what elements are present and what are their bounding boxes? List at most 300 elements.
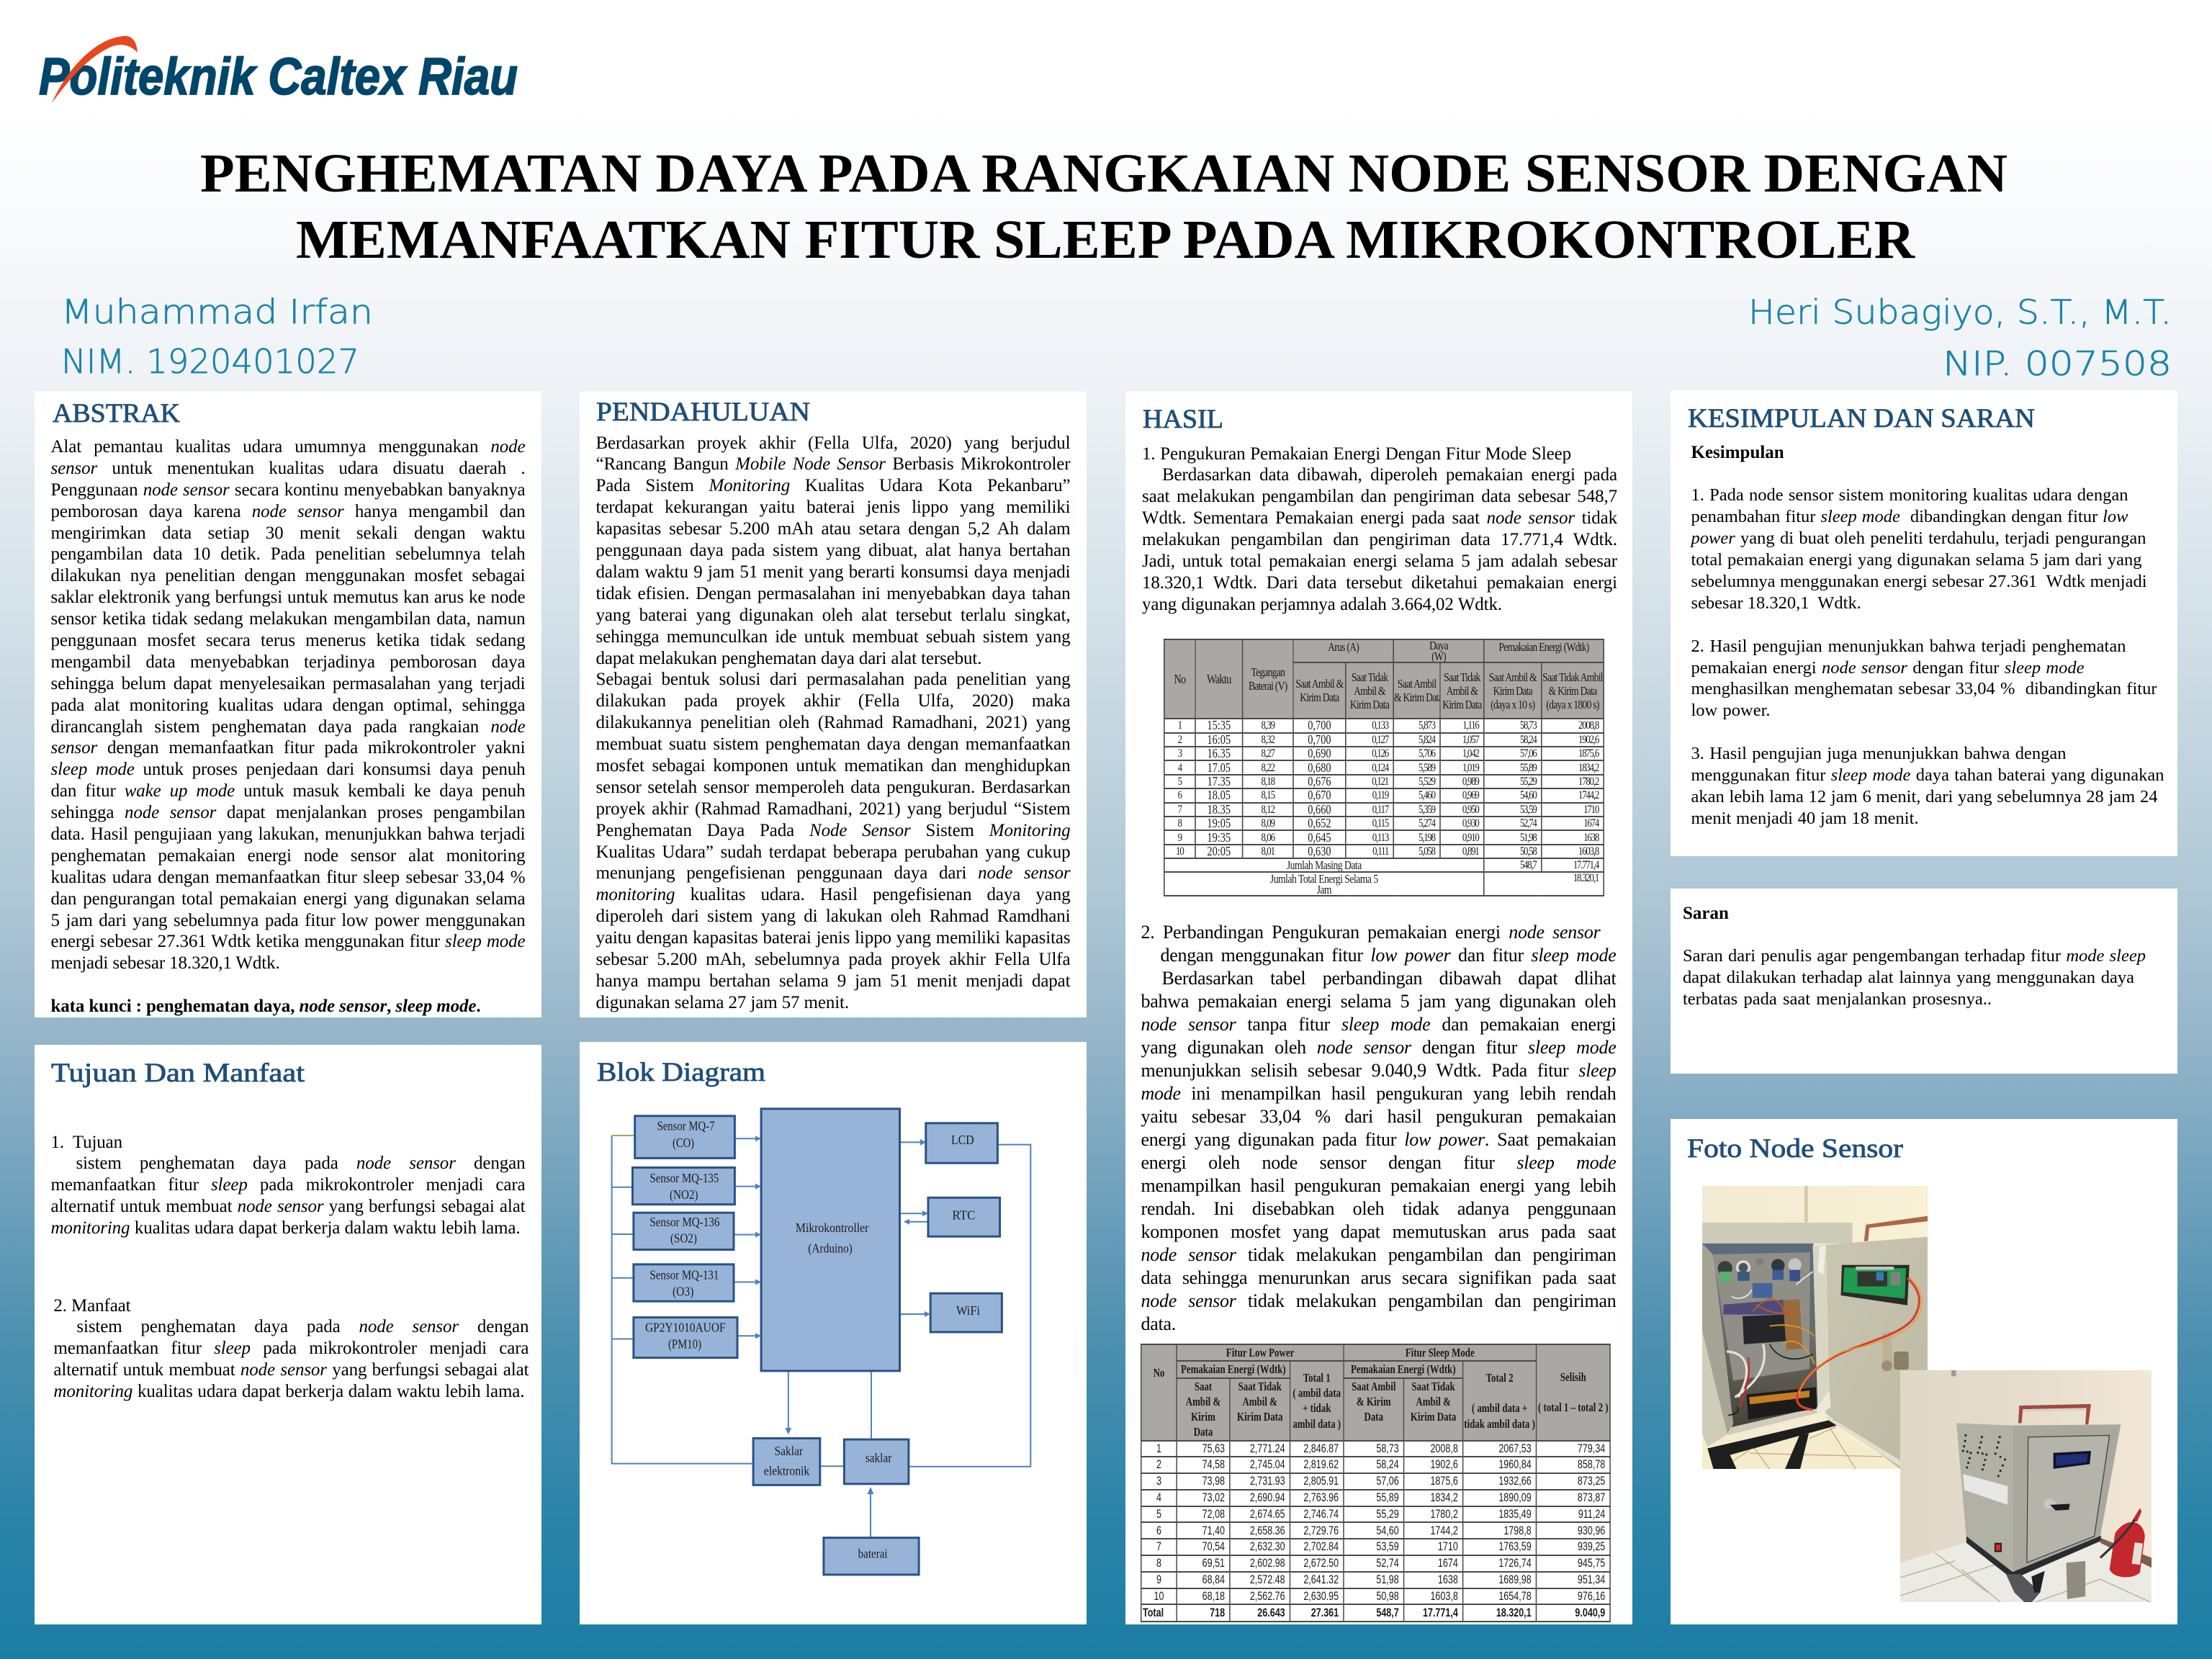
text: pendahuluan body: menunjang pengefisienan penggunaan daya dari node sensor — [596, 863, 1070, 883]
table: pengukuran energi fitur sleep mode: 8,18 — [1261, 775, 1274, 788]
table: perbandingan fitur low power dan sleep mode: ( total 1 – total 2 ) — [1538, 1401, 1609, 1414]
table: pengukuran energi fitur sleep mode: (daya x 1800 s) — [1546, 698, 1599, 711]
table: pengukuran energi fitur sleep mode: 1710 — [1583, 804, 1599, 816]
text: manfaat: memanfaatkan fitur sleep pada mikrokontroler menjadi cara — [53, 1339, 529, 1358]
text: hasil part 1: Wdtk. Sementara Pemakaian energi pada saat node sensor tidak — [1142, 508, 1617, 528]
table: perbandingan fitur low power dan sleep mode: Saat — [1195, 1380, 1212, 1393]
table: perbandingan fitur low power dan sleep mode: 73,98 — [1202, 1475, 1225, 1488]
sensor boxes: (SO2) — [670, 1231, 697, 1246]
table: perbandingan fitur low power dan sleep mode: 2,690.94 — [1250, 1491, 1285, 1504]
text: manfaat — [53, 1296, 529, 1401]
table: pengukuran energi fitur sleep mode: 8,32 — [1261, 734, 1274, 746]
text: kesimpulan: menit menjadi 40 jam 18 menit. — [1691, 809, 1918, 828]
text: hasil part 2: node sensor tidak melakukan pengambilan dan pengiriman — [1141, 1244, 1617, 1265]
text: tujuan: alternatif untuk membuat node sensor yang berfungsi sebagai alat — [50, 1197, 526, 1216]
table: pengukuran energi fitur sleep mode: 2 — [1177, 734, 1182, 746]
text: abstrak body: penggunaan mosfet secara terus menerus ketika tidak sedang — [50, 631, 526, 650]
table: pengukuran energi fitur sleep mode: 6 — [1177, 789, 1182, 801]
sensor boxes — [632, 1116, 737, 1358]
table: pengukuran energi fitur sleep mode: Tegangan — [1251, 665, 1285, 679]
advisor name and NIP: Heri Subagiyo, S.T., M.T. — [1748, 292, 2172, 331]
table: pengukuran energi fitur sleep mode: 5,824 — [1419, 734, 1434, 746]
table: pengukuran energi fitur sleep mode: 8,06 — [1261, 832, 1274, 844]
table: pengukuran energi fitur sleep mode: 5 — [1177, 775, 1182, 788]
table: perbandingan fitur low power dan sleep mode: 1932,66 — [1499, 1475, 1532, 1488]
heading: pendahuluan: PENDAHULUAN — [596, 397, 810, 427]
table: pengukuran energi fitur sleep mode: 5,706 — [1419, 747, 1434, 760]
table: perbandingan fitur low power dan sleep mode: 3 — [1156, 1475, 1161, 1488]
text: kesimpulan: menggunakan fitur sleep mode daya tahan baterai yang digunakan — [1691, 765, 2164, 785]
text: pendahuluan body: digunakan selama 27 jam 57 menit. — [596, 993, 849, 1012]
table: pengukuran energi fitur sleep mode: 8,12 — [1261, 804, 1274, 816]
text: hasil part 1: 1. Pengukuran Pemakaian Energi Dengan Fitur Mode Sleep — [1142, 444, 1571, 464]
text: abstrak body: dilakukan nya penelitian dengan menggunakan mosfet sebagai — [50, 566, 526, 585]
table: pengukuran energi fitur sleep mode: 17.771,4 — [1573, 859, 1599, 871]
text: hasil part 2: Berdasarkan tabel perbandingan dibawah dapat dlihat — [1162, 968, 1616, 989]
text: abstrak body: pengambilan data 10 detik. Pada penelitian sebelumnya telah — [50, 544, 526, 564]
text: hasil part 2: node sensor tidak melakukan pengambilan dan pengiriman — [1141, 1290, 1617, 1311]
table: perbandingan fitur low power dan sleep mode: 1763,59 — [1499, 1540, 1532, 1553]
table: perbandingan fitur low power dan sleep mode: 68,18 — [1202, 1590, 1225, 1603]
table: perbandingan fitur low power dan sleep mode: 53,59 — [1377, 1540, 1399, 1553]
text: saran — [1683, 904, 2146, 1009]
text: pendahuluan body: membuat suatu sistem penghematan daya dengan memanfaatkan — [596, 734, 1070, 754]
table: perbandingan fitur low power dan sleep mode: 2067,53 — [1499, 1442, 1532, 1455]
text: hasil part 2: data. — [1141, 1313, 1176, 1334]
table: pengukuran energi fitur sleep mode: 1780,2 — [1578, 775, 1599, 788]
text: pendahuluan body: tidak efisien. Dengan permasalahan ini menyebabkan daya tahan — [596, 584, 1070, 603]
table: pengukuran energi fitur sleep mode: & Kirim Data — [1548, 684, 1596, 698]
table: perbandingan fitur low power dan sleep mode: Ambil & — [1416, 1395, 1451, 1408]
table: pengukuran energi fitur sleep mode: 0,115 — [1372, 817, 1388, 830]
table: pengukuran energi fitur sleep mode: 1744,2 — [1578, 789, 1599, 801]
text: abstrak body: Penggunaan node sensor secara kontinu menyebabkan banyaknya — [50, 480, 526, 500]
text: kesimpulan: Kesimpulan — [1691, 443, 1784, 462]
table: perbandingan fitur low power dan sleep mode: 1638 — [1438, 1573, 1458, 1586]
text: kesimpulan — [1690, 443, 2164, 828]
table: pengukuran energi fitur sleep mode: Baterai (V) — [1248, 679, 1287, 693]
text: pendahuluan body: monitoring kualitas udara. Hasil pengefisienan daya yang — [596, 885, 1070, 904]
table: perbandingan fitur low power dan sleep mode: 1726,74 — [1499, 1557, 1532, 1570]
text: pendahuluan body — [596, 433, 1071, 1012]
table: perbandingan fitur low power dan sleep mode: 2,632.30 — [1250, 1540, 1285, 1553]
sensor boxes: (CO) — [673, 1136, 694, 1151]
table: perbandingan fitur low power dan sleep mode: 939,25 — [1578, 1540, 1605, 1553]
table: perbandingan fitur low power dan sleep mode: 779,34 — [1578, 1442, 1605, 1455]
table: perbandingan fitur low power dan sleep mode: Kirim Data — [1237, 1410, 1283, 1424]
table: pengukuran energi fitur sleep mode: (daya x 10 s) — [1491, 698, 1534, 711]
text: abstrak body: sleep mode untuk proses penjedaan dari konsumsi daya penuh — [50, 760, 526, 779]
table: perbandingan fitur low power dan sleep mode: 6 — [1156, 1524, 1161, 1537]
text: hasil part 2: rendah. Ini disebabkan oleh tidak adanya penggunaan — [1141, 1198, 1616, 1219]
text: abstrak body: dan fitur wake up mode untuk masuk kembali ke daya penuh — [50, 781, 526, 801]
sensor boxes: Sensor MQ-7 — [657, 1119, 714, 1133]
text: kesimpulan: pemakaian energi node sensor dengan fitur sleep mode — [1691, 658, 2084, 677]
text: manfaat: sistem penghematan daya pada node sensor dengan — [76, 1317, 529, 1336]
photo: node sensor closed box — [1900, 1370, 2152, 1602]
table: perbandingan fitur low power dan sleep mode: 58,24 — [1377, 1458, 1399, 1471]
text: hasil part 1 — [1142, 444, 1617, 614]
table: perbandingan fitur low power dan sleep mode: 718 — [1210, 1606, 1225, 1619]
table: perbandingan fitur low power dan sleep mode: 2,771.24 — [1250, 1442, 1285, 1455]
text: kesimpulan: low power. — [1691, 701, 1770, 720]
sensor boxes: GP2Y1010AUOF — [645, 1321, 726, 1335]
text: abstrak body: sensor untuk menentukan kualitas udara disuatu daerah . — [50, 459, 526, 478]
microcontroller box: (Arduino) — [808, 1241, 853, 1256]
table: pengukuran energi fitur sleep mode: 0,969 — [1462, 789, 1478, 801]
text: kesimpulan: 2. Hasil pengujian menunjukkan bahwa terjadi penghematan — [1691, 637, 2126, 656]
table: perbandingan fitur low power dan sleep mode: Kirim Data — [1411, 1410, 1457, 1424]
table: pengukuran energi fitur sleep mode: 1834,2 — [1578, 762, 1599, 774]
table: perbandingan fitur low power dan sleep mode: Total — [1143, 1606, 1164, 1619]
panel: saran — [1671, 889, 2177, 1074]
text: kesimpulan: sebelumnya menggunakan energi sebesar 27.361 Wdtk menjadi — [1691, 572, 2147, 591]
table: pengukuran energi fitur sleep mode: 8,39 — [1261, 719, 1274, 732]
table: pengukuran energi fitur sleep mode: 0,930 — [1462, 817, 1478, 830]
text: pendahuluan body: dapat melakukan penghematan daya dari alat tersebut. — [596, 648, 981, 668]
table: perbandingan fitur low power dan sleep mode: 2,572.48 — [1250, 1573, 1285, 1586]
microcontroller box — [761, 1109, 900, 1371]
table: pengukuran energi fitur sleep mode: 1674 — [1583, 817, 1599, 830]
table: pengukuran energi fitur sleep mode: 53,59 — [1519, 804, 1536, 816]
text: tujuan: 1. Tujuan — [50, 1133, 122, 1152]
text: pendahuluan body: Pada Sistem Monitoring Kualitas Udara Kota Pekanbaru” — [596, 476, 1070, 495]
table: perbandingan fitur low power dan sleep mode: 1834,2 — [1431, 1491, 1458, 1504]
table: pengukuran energi fitur sleep mode: 0,113 — [1372, 832, 1388, 844]
table: pengukuran energi fitur sleep mode: Saat Ambil & — [1295, 677, 1343, 691]
text: kesimpulan: sebesar 18.320,1 Wdtk. — [1691, 593, 1861, 613]
text: abstrak body: saklar elektronik yang berfungsi untuk memutus kan arus ke node — [50, 588, 526, 607]
text: pendahuluan body: dalam waktu 9 jam 51 menit yang berarti konsumsi daya menjadi — [596, 562, 1070, 582]
output boxes: LCD — [951, 1133, 974, 1147]
table: pengukuran energi fitur sleep mode: Saat Ambil — [1397, 677, 1436, 691]
table: pengukuran energi fitur sleep mode: 18.320,1 — [1573, 872, 1599, 884]
table: perbandingan fitur low power dan sleep mode: 9 — [1156, 1573, 1161, 1586]
text: tujuan: sistem penghematan daya pada node sensor dengan — [76, 1154, 526, 1173]
text: pendahuluan body: Penghematan Daya Pada Node Sensor Sistem Monitoring — [596, 821, 1070, 840]
text: hasil part 2: menampilkan hasil pengukuran pemakaian energi yang lebih — [1141, 1175, 1616, 1196]
power boxes: saklar — [866, 1450, 891, 1465]
text: kesimpulan: power yang di buat oleh peneliti terdahulu, terjadi pengurangan — [1691, 529, 2146, 548]
table: perbandingan fitur low power dan sleep mode: 68,84 — [1202, 1573, 1225, 1586]
table: pengukuran energi fitur sleep mode: Ambil & — [1446, 684, 1478, 698]
text: pendahuluan body: terdapat kekurangan yaitu baterai jenis lippo yang memiliki — [596, 498, 1070, 517]
table: perbandingan fitur low power dan sleep mode: 8 — [1156, 1557, 1161, 1570]
table: perbandingan fitur low power dan sleep mode: Total 1 — [1303, 1371, 1331, 1385]
table: perbandingan fitur low power dan sleep mode: 1960,84 — [1499, 1458, 1532, 1471]
table: pengukuran energi fitur sleep mode: 8,22 — [1261, 762, 1274, 774]
table: perbandingan fitur low power dan sleep mode: Total 2 — [1486, 1371, 1514, 1385]
microcontroller box: Mikrokontroller — [796, 1220, 868, 1235]
table: perbandingan fitur low power dan sleep mode: 2,562.76 — [1250, 1590, 1285, 1603]
table: perbandingan fitur low power dan sleep mode: 2,846.87 — [1304, 1442, 1339, 1455]
text: hasil part 2: data sehingga menurunkan arus secara signifikan pada saat — [1141, 1267, 1616, 1288]
title — [200, 143, 2008, 270]
sensor boxes: (NO2) — [670, 1187, 698, 1202]
table: perbandingan fitur low power dan sleep mode: ( ambil data — [1293, 1386, 1341, 1400]
table: perbandingan fitur low power dan sleep mode: 4 — [1156, 1491, 1161, 1504]
table: perbandingan fitur low power dan sleep mode: 51,98 — [1377, 1573, 1399, 1586]
author name and NIM: Muhammad Irfan — [61, 292, 373, 331]
table: pengukuran energi fitur sleep mode: Saat Tidak — [1351, 670, 1388, 684]
text: abstrak body: sensor dengan memanfaatkan fitur pada mikrokontroler yakni — [50, 738, 526, 757]
sensor boxes: (PM10) — [668, 1336, 701, 1352]
table: pengukuran energi fitur sleep mode: (W) — [1431, 649, 1445, 662]
text: pendahuluan body: yang baterai yang digunakan oleh alat tersebut terlalu singkat, — [596, 606, 1070, 625]
table: perbandingan fitur low power dan sleep mode: 52,74 — [1377, 1557, 1399, 1570]
text: kesimpulan: menghasilkan menghematan sebesar 33,04 % dibandingkan fitur — [1691, 679, 2157, 698]
author name and NIM: NIM. 1920401027 — [61, 342, 359, 381]
table: pengukuran energi fitur sleep mode: 1875,6 — [1578, 747, 1599, 760]
table: perbandingan fitur low power dan sleep mode: ambil data ) — [1293, 1417, 1341, 1431]
output boxes — [926, 1123, 1002, 1332]
table: pengukuran energi fitur sleep mode: 0,111 — [1372, 845, 1388, 858]
table: perbandingan fitur low power dan sleep mode: 873,87 — [1578, 1491, 1605, 1504]
table: pengukuran energi fitur sleep mode: 5,359 — [1419, 804, 1434, 816]
table: pengukuran energi fitur sleep mode: Kirim Data — [1493, 684, 1532, 698]
power boxes: baterai — [858, 1546, 888, 1560]
table: pengukuran energi fitur sleep mode: 0,950 — [1462, 804, 1478, 816]
table: perbandingan fitur low power dan sleep mode: 50,98 — [1377, 1590, 1399, 1603]
table: pengukuran energi fitur sleep mode: 8 — [1177, 817, 1182, 830]
author name and NIM — [61, 292, 373, 381]
panel: blok diagram — [580, 1042, 1087, 1624]
text: pendahuluan body: “Rancang Bangun Mobile Node Sensor Berbasis Mikrokontroler — [596, 454, 1070, 474]
text: hasil part 2: 2. Perbandingan Pengukuran pemakaian energi node sensor — [1141, 922, 1600, 943]
text: hasil part 2: yang digunakan oleh node sensor dengan fitur sleep mode — [1141, 1037, 1617, 1058]
table: pengukuran energi fitur sleep mode: 0,891 — [1462, 845, 1478, 858]
chart: block diagram — [611, 1107, 1031, 1575]
table: perbandingan fitur low power dan sleep mode: 2,672.50 — [1304, 1557, 1339, 1570]
table: pengukuran energi fitur sleep mode: 55,29 — [1519, 775, 1536, 788]
table: pengukuran energi fitur sleep mode: No — [1174, 672, 1185, 686]
table: perbandingan fitur low power dan sleep mode: 2,674.65 — [1250, 1508, 1285, 1521]
table: pengukuran energi fitur sleep mode: Kirim Data — [1300, 691, 1339, 704]
table: perbandingan fitur low power dan sleep mode: 945,75 — [1578, 1557, 1605, 1570]
table: pengukuran energi fitur sleep mode: Waktu — [1206, 672, 1231, 686]
table: perbandingan fitur low power dan sleep mode: Fitur Sleep Mode — [1406, 1346, 1475, 1359]
table: perbandingan fitur low power dan sleep mode: Saat Ambil — [1352, 1380, 1396, 1393]
table: pengukuran energi fitur sleep mode: 5,589 — [1419, 762, 1434, 774]
text: pendahuluan body: proyek akhir (Rahmad Ramadhani, 2021) yang berjudul “Sistem — [596, 799, 1070, 819]
table: perbandingan fitur low power dan sleep mode: 930,96 — [1578, 1524, 1605, 1537]
table: pengukuran energi fitur sleep mode: 1638 — [1583, 832, 1599, 844]
table: perbandingan fitur low power dan sleep mode: Pemakaian Energi (Wdtk) — [1181, 1362, 1286, 1376]
table: perbandingan fitur low power dan sleep mode: Saat Tidak — [1412, 1380, 1455, 1393]
text: abstrak body: sensor ketika tidak sedang melakukan mengambilan data, namun — [50, 609, 526, 629]
table: perbandingan fitur low power dan sleep mode: Pemakaian Energi (Wdtk) — [1351, 1362, 1456, 1376]
table: perbandingan fitur low power dan sleep mode: No — [1154, 1366, 1165, 1380]
table: pengukuran energi fitur sleep mode: Arus (A) — [1328, 640, 1359, 654]
table: pengukuran energi fitur sleep mode: 0,133 — [1372, 719, 1388, 732]
sensor boxes: Sensor MQ-135 — [649, 1171, 719, 1185]
text: hasil part 1: melakukan pengambilan dan pengiriman data 17.771,4 Wdtk. — [1142, 530, 1617, 549]
text: abstrak body: pada alat monitoring kualitas udara dengan optimal, sehingga — [50, 696, 526, 715]
text: manfaat: 2. Manfaat — [53, 1296, 130, 1316]
table: perbandingan fitur low power dan sleep mode: 1780,2 — [1431, 1508, 1458, 1521]
table: perbandingan fitur low power dan sleep mode: & Kirim — [1357, 1395, 1391, 1408]
table: perbandingan fitur low power dan sleep mode: + tidak — [1303, 1401, 1331, 1415]
table: pengukuran energi fitur sleep mode: Jumlah Masing Data — [1286, 858, 1361, 872]
table: perbandingan fitur low power dan sleep mode: 75,63 — [1202, 1442, 1225, 1455]
text: kesimpulan: 1. Pada node sensor sistem monitoring kualitas udara dengan — [1691, 485, 2128, 505]
table: pengukuran energi fitur sleep mode: 1 — [1177, 719, 1182, 732]
table: perbandingan fitur low power dan sleep mode: 2,658.36 — [1250, 1524, 1285, 1537]
table: pengukuran energi fitur sleep mode: 54,60 — [1519, 789, 1536, 801]
text: pendahuluan body: Berdasarkan proyek akhir (Fella Ulfa, 2020) yang berjudul — [596, 433, 1070, 453]
table: pengukuran energi fitur sleep mode: 1,057 — [1462, 734, 1478, 746]
text: tujuan — [50, 1133, 526, 1238]
table: perbandingan fitur low power dan sleep mode: Data — [1364, 1410, 1383, 1424]
text: pendahuluan body: dilakukannya penelitian oleh (Rahmad Ramadhani, 2021) yang — [596, 713, 1070, 732]
table: pengukuran energi fitur sleep mode: 55,89 — [1519, 762, 1536, 774]
table: perbandingan fitur low power dan sleep mode: 1603,8 — [1431, 1590, 1458, 1603]
text: pendahuluan body: yaitu dengan kapasitas baterai jenis lippo yang memiliki kapasitas — [596, 928, 1070, 948]
table: pengukuran energi fitur sleep mode: 2008,8 — [1578, 719, 1599, 732]
table: perbandingan fitur low power dan sleep mode: 55,89 — [1377, 1491, 1399, 1504]
heading: abstrak: ABSTRAK — [53, 399, 180, 428]
table: pengukuran energi fitur sleep mode: 8,15 — [1261, 789, 1274, 801]
text: pendahuluan body: hanya mampu bertahan selama 9 jam 51 menit menjadi dapat — [596, 971, 1070, 991]
table: perbandingan fitur low power dan sleep mode: 2,729.76 — [1304, 1524, 1339, 1537]
text: hasil part 1: Berdasarkan data dibawah, diperoleh pemakaian energi pada — [1162, 465, 1617, 485]
text: kesimpulan: 3. Hasil pengujian juga menunjukkan bahwa dengan — [1691, 744, 2067, 763]
table: perbandingan fitur low power dan sleep mode: 2,745.04 — [1250, 1458, 1285, 1471]
table: pengukuran energi fitur sleep mode: Saat Tidak — [1444, 670, 1480, 684]
table: pengukuran energi fitur sleep mode: 0,127 — [1372, 734, 1388, 746]
table: perbandingan fitur low power dan sleep mode: 72,08 — [1202, 1508, 1225, 1521]
table: perbandingan fitur low power dan sleep mode: Ambil & — [1243, 1395, 1277, 1408]
table: perbandingan fitur low power dan sleep mode: 10 — [1154, 1590, 1164, 1603]
table: perbandingan fitur low power dan sleep mode: 548,7 — [1377, 1606, 1399, 1619]
text: abstrak body: penghematan pemakaian energi node sensor alat monitoring — [50, 846, 526, 866]
text: abstrak body: dan pengurangan total pemakaian energi yang digunakan selama — [50, 889, 526, 909]
table: perbandingan fitur low power dan sleep mode — [1141, 1344, 1611, 1622]
table: pengukuran energi fitur sleep mode: 0,121 — [1372, 775, 1388, 788]
table: pengukuran energi fitur sleep mode: 5,058 — [1419, 845, 1434, 858]
table: perbandingan fitur low power dan sleep mode: 1 — [1156, 1442, 1161, 1455]
panel: hasil — [1125, 391, 1632, 1624]
table: pengukuran energi fitur sleep mode: Kirim Data — [1442, 698, 1481, 711]
table: pengukuran energi fitur sleep mode: 3 — [1177, 747, 1182, 760]
advisor name and NIP: NIP. 007508 — [1943, 344, 2172, 383]
table: perbandingan fitur low power dan sleep mode: Fitur Low Power — [1226, 1346, 1294, 1359]
table: pengukuran energi fitur sleep mode: 0,910 — [1462, 832, 1478, 844]
text: tujuan: monitoring kualitas udara dapat berkerja dalam waktu lebih lama. — [50, 1218, 520, 1238]
table: pengukuran energi fitur sleep mode: Ambil & — [1354, 684, 1385, 698]
text: kesimpulan: penambahan fitur sleep mode dibandingkan dengan fitur low — [1691, 507, 2128, 526]
table: pengukuran energi fitur sleep mode: 5,274 — [1419, 817, 1434, 830]
table: pengukuran energi fitur sleep mode: Kirim Data — [1349, 698, 1389, 711]
title: PENGHEMATAN DAYA PADA RANGKAIAN NODE SENSOR DENGAN — [200, 143, 2008, 204]
text: abstrak body: data. Hasil pengujiaan yang lakukan, menunjukkan bahwa terjadi — [50, 824, 526, 844]
table: pengukuran energi fitur sleep mode: 4 — [1177, 762, 1182, 774]
table: pengukuran energi fitur sleep mode: 8,01 — [1261, 845, 1274, 858]
heading: foto node sensor: Foto Node Sensor — [1687, 1134, 1903, 1164]
table: perbandingan fitur low power dan sleep mode: 2,805.91 — [1304, 1475, 1339, 1488]
table: pengukuran energi fitur sleep mode: 548,7 — [1519, 859, 1536, 871]
table: pengukuran energi fitur sleep mode: 7 — [1177, 804, 1182, 816]
text: saran: dapat dilakukan terhadap alat lainnya yang menggunakan daya — [1683, 968, 2134, 987]
table: pengukuran energi fitur sleep mode: 0,119 — [1372, 789, 1388, 801]
table: perbandingan fitur low power dan sleep mode: 873,25 — [1578, 1475, 1605, 1488]
text: pendahuluan body: Kualitas Udara” sudah terdapat beberapa perubahan yang cukup — [596, 842, 1070, 862]
table: perbandingan fitur low power dan sleep mode: 2,630.95 — [1304, 1590, 1339, 1603]
heading: tujuan dan manfaat: Tujuan Dan Manfaat — [51, 1058, 305, 1088]
table: perbandingan fitur low power dan sleep mode: 55,29 — [1377, 1508, 1399, 1521]
text: saran: Saran dari penulis agar pengembangan terhadap fitur mode sleep — [1683, 946, 2146, 966]
table: perbandingan fitur low power dan sleep mode: Data — [1194, 1425, 1213, 1439]
table: pengukuran energi fitur sleep mode — [1164, 639, 1604, 896]
panel: tujuan dan manfaat — [35, 1045, 541, 1624]
table: perbandingan fitur low power dan sleep mode: 2,763.96 — [1304, 1491, 1339, 1504]
table: perbandingan fitur low power dan sleep mode: 7 — [1156, 1540, 1161, 1553]
table: pengukuran energi fitur sleep mode: 0,989 — [1462, 775, 1478, 788]
text: manfaat: alternatif untuk membuat node sensor yang berfungsi sebagai alat — [53, 1360, 529, 1380]
table: perbandingan fitur low power dan sleep mode: 1689,98 — [1499, 1573, 1532, 1586]
table: perbandingan fitur low power dan sleep mode: 1902,6 — [1431, 1458, 1458, 1471]
text: pendahuluan body: sensor setelah sensor memperoleh data pengukuran. Berdasarkan — [596, 778, 1070, 797]
text: hasil part 2: dengan menggunakan fitur low power dan fitur sleep mode — [1161, 945, 1616, 966]
photo: node sensor open door — [1702, 1186, 1928, 1469]
table: perbandingan fitur low power dan sleep mode: 2 — [1156, 1458, 1161, 1471]
heading: hasil: HASIL — [1143, 405, 1223, 434]
panel: abstrak — [35, 391, 541, 1017]
text: abstrak body: 5 jam dari yang sebelumnya pada fitur low power menggunakan — [50, 911, 526, 930]
table: perbandingan fitur low power dan sleep mode: 2,819.62 — [1304, 1458, 1339, 1471]
table: pengukuran energi fitur sleep mode: 0,117 — [1372, 804, 1388, 816]
table: perbandingan fitur low power dan sleep mode: 18.320,1 — [1496, 1606, 1532, 1619]
text: kesimpulan: total pemakaian energi yang digunakan selama 5 jam dari yang — [1691, 550, 2141, 570]
text: abstrak body: kata kunci : penghematan daya, node sensor, sleep mode. — [50, 997, 480, 1016]
table: perbandingan fitur low power dan sleep mode: 73,02 — [1202, 1491, 1225, 1504]
table: perbandingan fitur low power dan sleep mode: 2,641.32 — [1304, 1573, 1339, 1586]
text: abstrak body: mengambil data menyebabkan terjadinya pemborosan daya — [50, 652, 526, 672]
panel: pendahuluan — [580, 392, 1087, 1017]
text: kesimpulan: akan lebih lama 12 jam 6 menit, dari yang sebelumnya 28 jam 24 — [1691, 787, 2157, 806]
text: pendahuluan body: dilakukan pada proyek akhir (Fella Ulfa, 2020) maka — [596, 691, 1070, 711]
text: hasil part 2: menunjukkan selisih sebesar 9.040,9 Wdtk. Pada fitur sleep — [1141, 1060, 1616, 1081]
table: pengukuran energi fitur sleep mode: Saat Ambil & — [1488, 670, 1536, 684]
table: pengukuran energi fitur sleep mode: 5,529 — [1419, 775, 1434, 788]
text: abstrak body: mengirimkan data setiap 30 menit sekali dengan waktu — [50, 523, 526, 543]
table: perbandingan fitur low power dan sleep mode: 2,746.74 — [1304, 1508, 1339, 1521]
table: perbandingan fitur low power dan sleep mode: 58,73 — [1377, 1442, 1399, 1455]
table: pengukuran energi fitur sleep mode: 5,198 — [1419, 832, 1434, 844]
sensor boxes: Sensor MQ-131 — [649, 1267, 719, 1282]
table: pengukuran energi fitur sleep mode: Pemakaian Energi (Wdtk) — [1498, 640, 1588, 654]
table: perbandingan fitur low power dan sleep mode: 69,51 — [1202, 1557, 1225, 1570]
table: perbandingan fitur low power dan sleep mode: tidak ambil data ) — [1464, 1417, 1535, 1431]
sensor boxes: Sensor MQ-136 — [649, 1215, 719, 1229]
text: hasil part 2: energi yang digunakan pada fitur low power. Saat pemakaian — [1141, 1129, 1616, 1150]
text: hasil part 2: node sensor tanpa fitur sleep mode dan pemakaian energi — [1141, 1014, 1616, 1035]
text: pendahuluan body: kapasitas sebesar 5.200 mAh atau setara dengan 5,2 Ah dalam — [596, 519, 1070, 539]
text: tujuan: memanfaatkan fitur sleep pada mikrokontroler menjadi cara — [50, 1175, 526, 1195]
table: perbandingan fitur low power dan sleep mode: 1710 — [1438, 1540, 1458, 1553]
text: manfaat: monitoring kualitas udara dapat berkerja dalam waktu lebih lama. — [53, 1382, 524, 1401]
table: perbandingan fitur low power dan sleep mode: 951,34 — [1578, 1573, 1605, 1586]
table: pengukuran energi fitur sleep mode: 5,460 — [1419, 789, 1434, 801]
output boxes: RTC — [952, 1208, 975, 1223]
table: perbandingan fitur low power dan sleep mode: 1744,2 — [1431, 1524, 1458, 1537]
output boxes: WiFi — [956, 1303, 980, 1318]
table: perbandingan fitur low power dan sleep mode: 1890,09 — [1499, 1491, 1532, 1504]
text: hasil part 1: saat melakukan pengambilan dan pengiriman data sebesar 548,7 — [1142, 487, 1617, 506]
table: perbandingan fitur low power dan sleep mode: 911,24 — [1578, 1508, 1605, 1521]
text: hasil part 2 — [1141, 922, 1617, 1334]
table: perbandingan fitur low power dan sleep mode: Kirim — [1191, 1410, 1215, 1424]
